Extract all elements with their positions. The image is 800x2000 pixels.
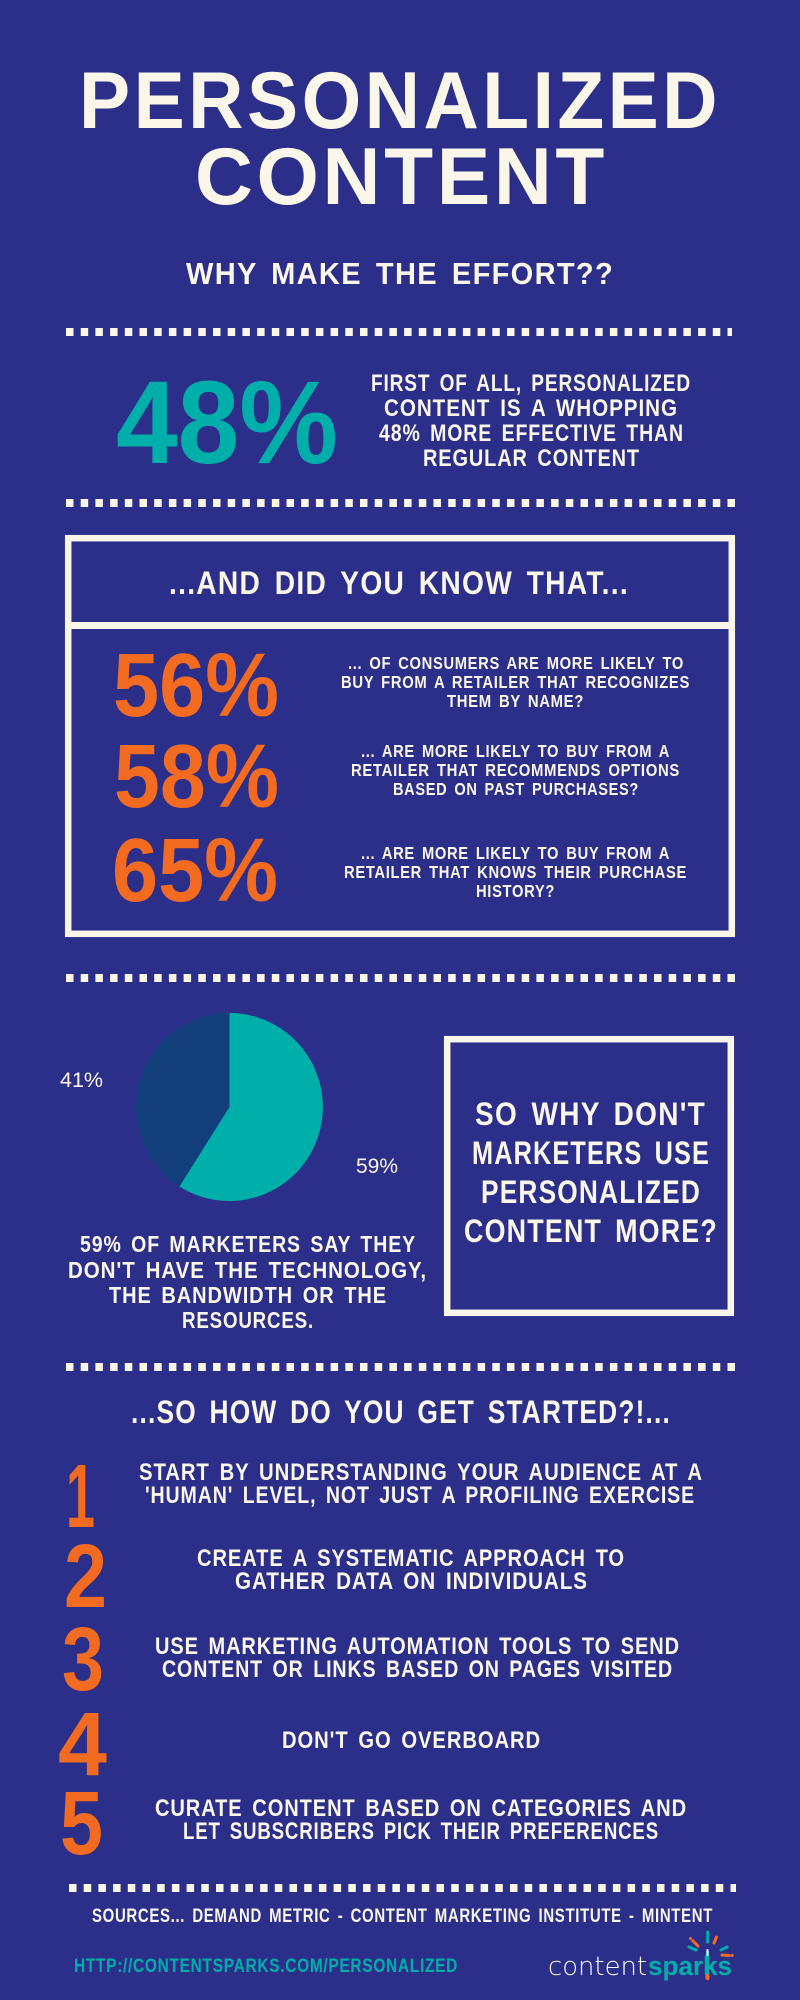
big number 48%: 48%	[116, 357, 338, 489]
step 2: GATHER DATA ON INDIVIDUALS	[235, 1568, 588, 1595]
pie chart	[60, 1013, 398, 1201]
pie label 41%: 41%	[60, 1069, 103, 1092]
statistic row: 65%: ... ARE MORE LIKELY TO BUY FROM A	[361, 843, 670, 863]
statistic row: 58%: BASED ON PAST PURCHASES?	[393, 779, 639, 799]
callout: why not: MARKETERS USE	[472, 1135, 710, 1171]
step 1: 'HUMAN' LEVEL, NOT JUST A PROFILING EXERCISE	[145, 1482, 695, 1509]
statistic row: 56%: 56%	[113, 636, 279, 736]
statistic description: FIRST OF ALL, PERSONALIZED	[371, 370, 691, 397]
statistic row: 56%: ... OF CONSUMERS ARE MORE LIKELY TO	[348, 653, 684, 673]
pie caption: RESOURCES.	[182, 1307, 314, 1333]
statistic description: 48% MORE EFFECTIVE THAN	[379, 420, 684, 447]
statistic row: 58%	[114, 727, 680, 827]
statistic row: 58%: RETAILER THAT RECOMMENDS OPTIONS	[351, 760, 680, 780]
section heading: ...SO HOW DO YOU GET STARTED?!...	[131, 1394, 671, 1430]
step 3: CONTENT OR LINKS BASED ON PAGES VISITED	[162, 1656, 673, 1683]
statistic row: 65%	[112, 821, 687, 921]
title: CONTENT	[195, 132, 608, 222]
step 5: LET SUBSCRIBERS PICK THEIR PREFERENCES	[183, 1818, 659, 1845]
statistic row: 58%: 58%	[114, 727, 279, 827]
callout: why not: PERSONALIZED	[481, 1174, 701, 1210]
pie caption	[68, 1231, 427, 1333]
step 3: USE MARKETING AUTOMATION TOOLS TO SEND	[155, 1633, 680, 1660]
callout: why not: SO WHY DON'T	[475, 1096, 706, 1132]
pie caption: THE BANDWIDTH OR THE	[109, 1282, 387, 1308]
statistic row: 65%: RETAILER THAT KNOWS THEIR PURCHASE	[344, 862, 687, 882]
statistic description: REGULAR CONTENT	[423, 445, 640, 472]
step 2	[64, 1527, 625, 1627]
step 4	[58, 1695, 541, 1795]
icon: pencil spark	[689, 1932, 732, 1978]
step 1: 1	[66, 1447, 95, 1547]
step 5: CURATE CONTENT BASED ON CATEGORIES AND	[155, 1795, 687, 1822]
panel heading: ...AND DID YOU KNOW THAT...	[169, 565, 629, 601]
pie caption: 59% OF MARKETERS SAY THEY	[80, 1231, 416, 1257]
step 3	[62, 1610, 680, 1710]
statistic row: 58%: ... ARE MORE LIKELY TO BUY FROM A	[361, 741, 670, 761]
step 2: 2	[64, 1527, 107, 1627]
step 5: 5	[60, 1774, 103, 1874]
step 2: CREATE A SYSTEMATIC APPROACH TO	[197, 1545, 625, 1572]
statistic description: CONTENT IS A WHOPPING	[384, 395, 678, 422]
statistic row: 56%: BUY FROM A RETAILER THAT RECOGNIZES	[341, 672, 690, 692]
pie caption: DON'T HAVE THE TECHNOLOGY,	[68, 1257, 427, 1283]
statistic row: 56%	[113, 636, 690, 736]
title	[79, 56, 721, 222]
logo: contentsparks: sparks	[648, 1951, 732, 1981]
url: HTTP://CONTENTSPARKS.COM/PERSONALIZED	[74, 1956, 458, 1977]
statistic description	[371, 370, 691, 472]
step 5	[60, 1774, 687, 1874]
step 4: DON'T GO OVERBOARD	[282, 1727, 541, 1754]
statistic row: 56%: THEM BY NAME?	[447, 691, 584, 711]
statistic row: 65%: HISTORY?	[476, 881, 555, 901]
callout: why not: CONTENT MORE?	[464, 1213, 718, 1249]
pie label 59%: 59%	[356, 1155, 398, 1178]
step 1: START BY UNDERSTANDING YOUR AUDIENCE AT A	[139, 1459, 703, 1486]
step 4: 4	[58, 1695, 107, 1795]
statistic row: 65%: 65%	[112, 821, 278, 921]
subtitle: WHY MAKE THE EFFORT??	[186, 256, 614, 291]
step 3: 3	[62, 1610, 104, 1710]
logo: contentsparks: content	[548, 1952, 647, 1982]
logo: contentsparks	[548, 1932, 732, 1982]
panel: 48% statistic	[116, 357, 691, 489]
panel: did you know	[68, 538, 732, 934]
panel frame	[68, 538, 732, 934]
callout: why not	[447, 1039, 731, 1313]
step 1	[66, 1447, 703, 1547]
title: PERSONALIZED	[79, 56, 721, 146]
